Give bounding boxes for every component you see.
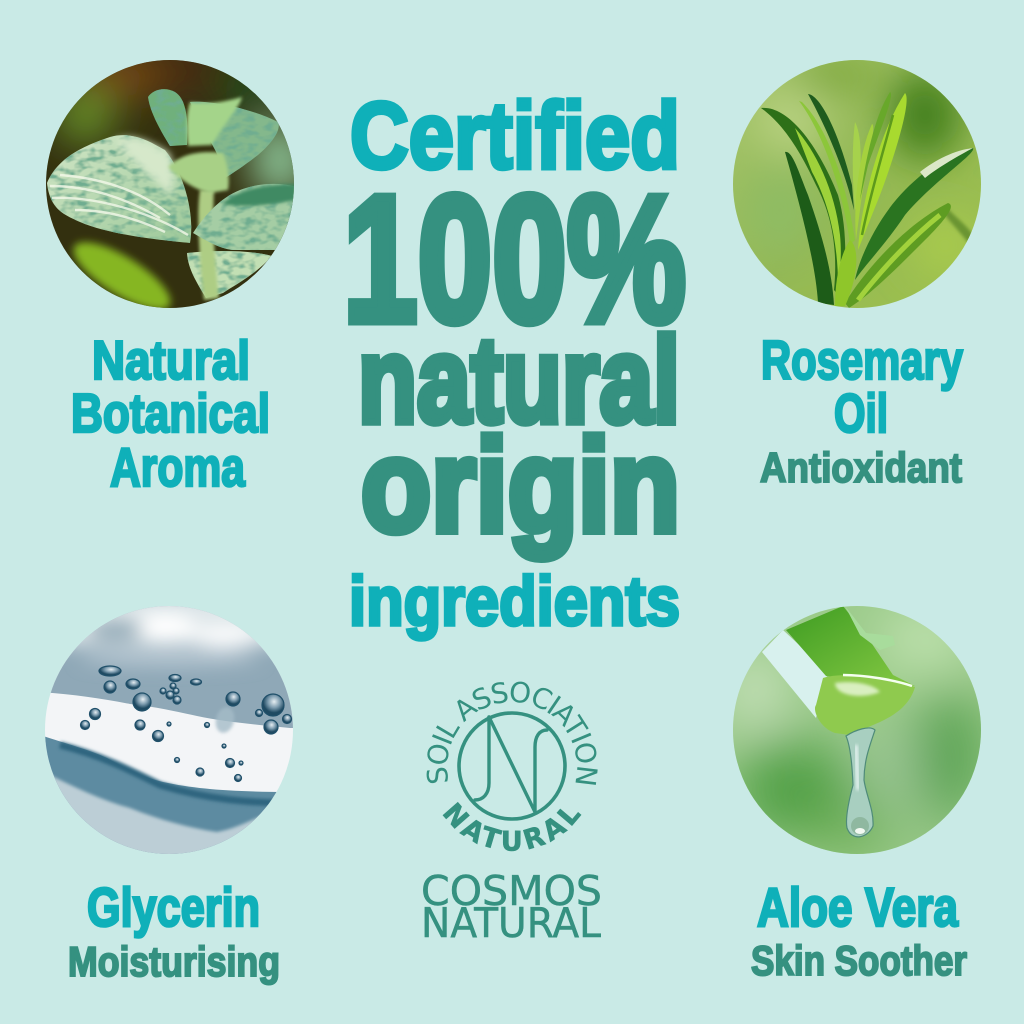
photo: aloe vera drip [730, 600, 990, 860]
logo text: Natural: NATURAL [421, 899, 601, 947]
logo text: Natural arc: NATURAL [442, 802, 582, 852]
label: Rosemary Oil Antioxidant: Oil [834, 382, 888, 444]
logo text: Soil Association: SOIL ASSOCIATION [426, 682, 598, 785]
label: Glycerin Moisturising: Glycerin [87, 876, 260, 938]
label: Rosemary Oil Antioxidant [760, 329, 963, 491]
label: Aloe Vera Skin Soother [751, 876, 967, 984]
label: Glycerin Moisturising: Moisturising [68, 938, 280, 985]
label: Natural Botanical Aroma: Natural [92, 329, 250, 391]
label: Aloe Vera Skin Soother: Aloe Vera [757, 876, 958, 938]
label: Natural Botanical Aroma: Aroma [110, 436, 245, 498]
logo: Soil Association Cosmos Natural [421, 682, 602, 947]
label: Aloe Vera Skin Soother: Skin Soother [751, 937, 967, 984]
photo: rosemary sprig [730, 55, 990, 315]
photo: glycerin gel with bubbles [45, 606, 293, 854]
headline [343, 83, 686, 640]
label: Natural Botanical Aroma: Botanical [71, 382, 270, 444]
heading: ingredients: ingredients [349, 562, 680, 640]
label: Glycerin Moisturising [68, 876, 280, 985]
label: Natural Botanical Aroma [71, 329, 270, 498]
heading: natural: natural [358, 312, 680, 448]
label: Rosemary Oil Antioxidant: Antioxidant [760, 444, 962, 491]
logo text: Cosmos: COSMOS [421, 867, 602, 915]
heading: origin: origin [361, 412, 680, 559]
heading: Certified: Certified [350, 83, 680, 189]
photo: mint leaves [46, 60, 294, 308]
logo ring and N mark [459, 713, 565, 819]
heading: 100%: 100% [343, 159, 686, 360]
label: Rosemary Oil Antioxidant: Rosemary [761, 329, 963, 391]
